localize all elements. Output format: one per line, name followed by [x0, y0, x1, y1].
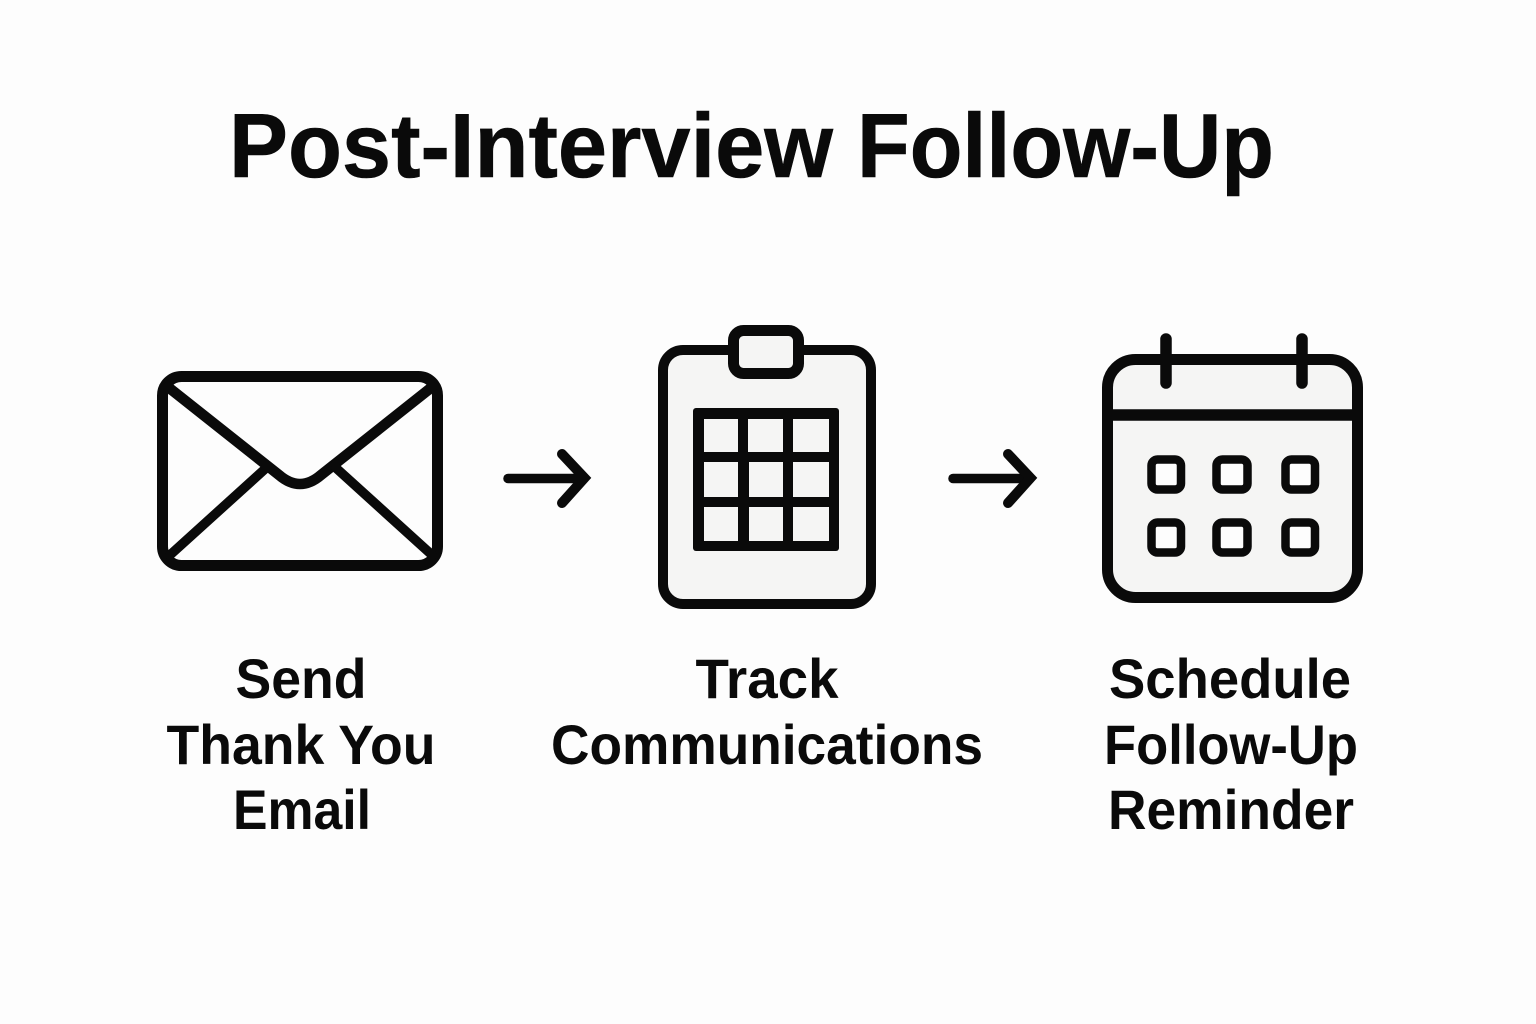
- title: Post-Interview: [229, 96, 833, 197]
- label: send thank you email: [166, 647, 436, 841]
- label: schedule follow-up reminder: [1104, 647, 1358, 841]
- label: schedule follow-up reminder: Reminder: [1108, 778, 1354, 841]
- icon: calendar: [1108, 339, 1358, 598]
- icon: envelope: [162, 376, 438, 566]
- label: send thank you email: Thank You: [166, 713, 436, 776]
- label: schedule follow-up reminder: Follow-Up: [1104, 713, 1358, 776]
- label: send thank you email: Email: [233, 778, 371, 841]
- label: track communications: [551, 647, 983, 776]
- title: [229, 96, 1274, 197]
- label: track communications: Track: [696, 647, 839, 710]
- arrow: step two to three: [953, 454, 1030, 503]
- label: schedule follow-up reminder: Schedule: [1109, 647, 1351, 710]
- title: Follow-Up: [857, 96, 1274, 197]
- label: send thank you email: Send: [236, 647, 366, 710]
- arrow: step one to two: [508, 454, 584, 503]
- icon: clipboard grid: [663, 330, 871, 604]
- label: track communications: Communications: [551, 713, 983, 776]
